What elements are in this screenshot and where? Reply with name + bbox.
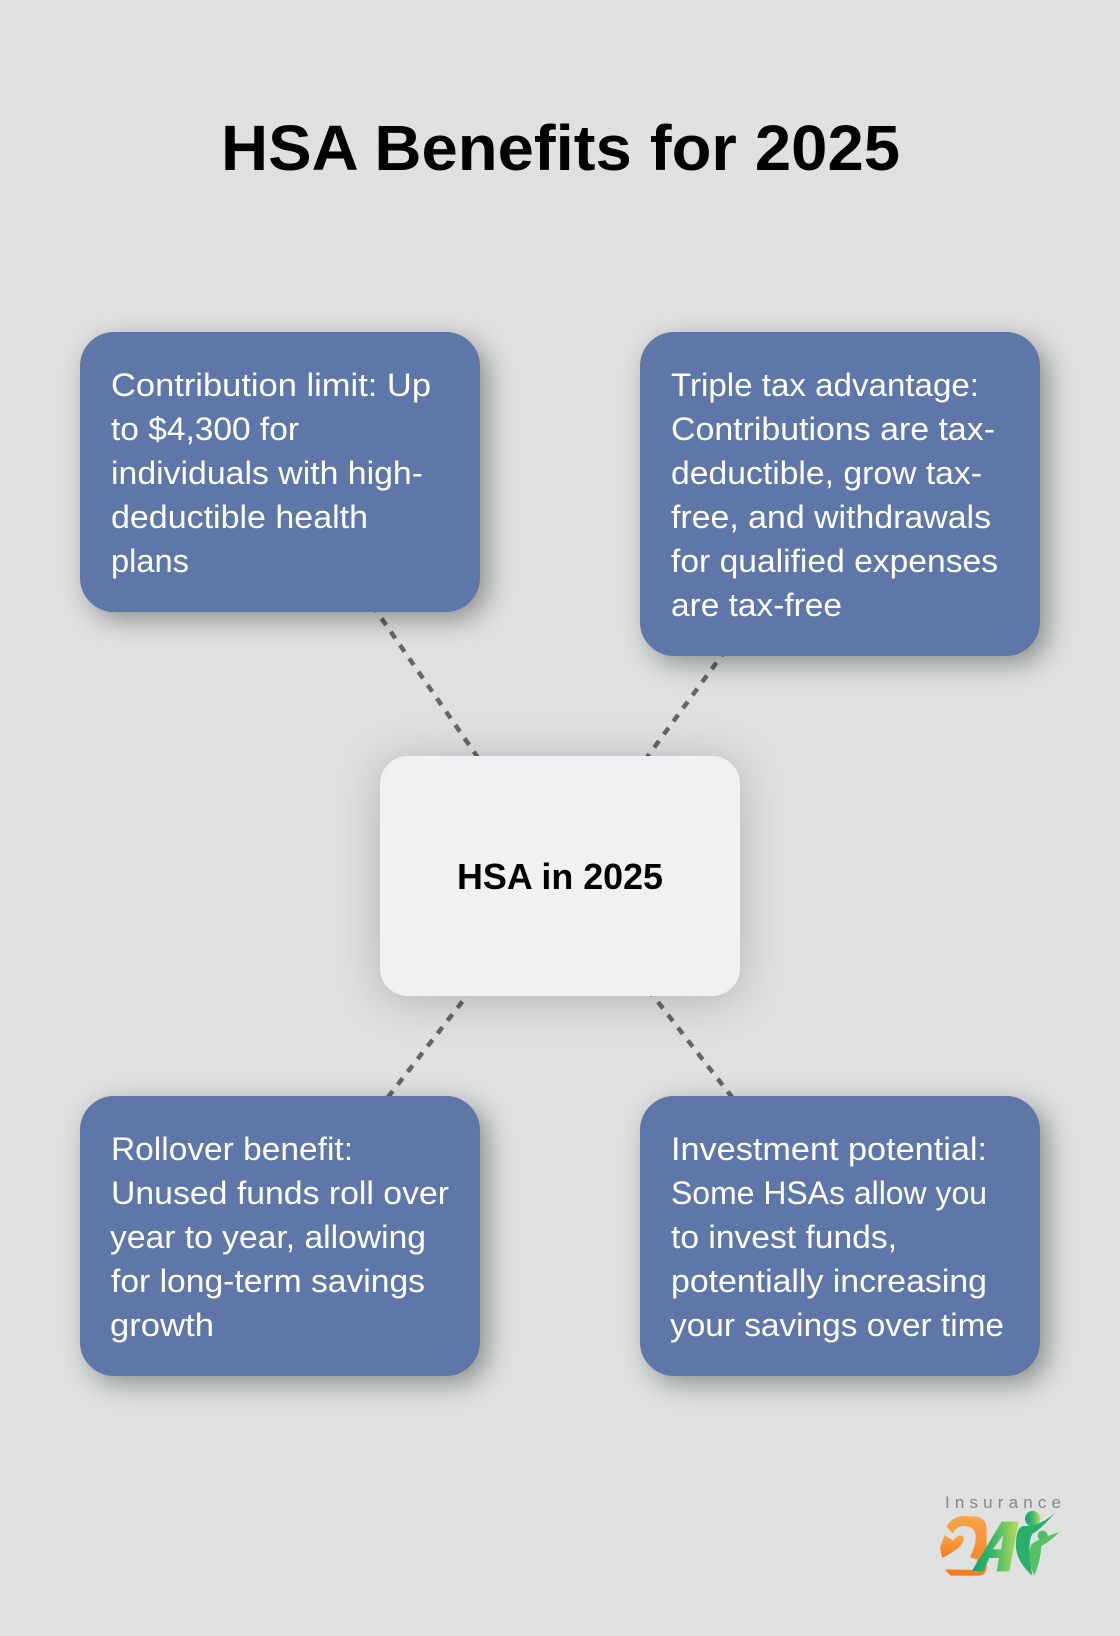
panel: triple tax advantage: Contributions are tax-: [671, 411, 995, 447]
panel: investment potential: Some HSAs allow you: [671, 1175, 987, 1211]
panel: triple tax advantage: [640, 332, 1040, 656]
connector: triple tax advantage to center: [560, 494, 840, 876]
panel: rollover benefit: [80, 1096, 480, 1376]
panel: contribution limit: individuals with high-: [111, 455, 423, 491]
panel: triple tax advantage: are tax-free: [671, 587, 842, 623]
logo: Insurance 2 Ai: Insurance: [945, 1493, 1061, 1512]
panel: rollover benefit: Rollover benefit:: [111, 1131, 353, 1167]
panel: rollover benefit: growth: [110, 1307, 214, 1343]
panel: contribution limit: deductible health: [111, 499, 368, 535]
panel: investment potential: potentially increasing: [671, 1263, 987, 1299]
panel: contribution limit: [80, 332, 480, 612]
panel: center hub: HSA in 2025: [457, 856, 663, 897]
panel: investment potential: your savings over time: [670, 1307, 1004, 1343]
panel: investment potential: [640, 1096, 1040, 1376]
panel: center hub: [380, 756, 740, 996]
connector: contribution limit to center: [280, 472, 560, 876]
panel: rollover benefit: year to year, allowing: [110, 1219, 426, 1255]
panel: triple tax advantage: free, and withdrawals: [671, 499, 991, 535]
connector: rollover benefit to center: [280, 876, 560, 1236]
panel: contribution limit: to $4,300 for: [111, 411, 299, 447]
panel: rollover benefit: Unused funds roll over: [111, 1175, 449, 1211]
panel: contribution limit: Contribution limit: Up: [111, 367, 431, 403]
title: HSA Benefits for 2025: [221, 112, 900, 184]
logo: Insurance 2 Ai: [940, 1493, 1061, 1576]
panel: investment potential: to invest funds,: [671, 1219, 897, 1255]
panel: contribution limit: plans: [111, 543, 189, 579]
connector: investment potential to center: [560, 876, 840, 1236]
panel: triple tax advantage: Triple tax advantage:: [671, 367, 979, 403]
panel: triple tax advantage: deductible, grow tax-: [671, 455, 982, 491]
panel: triple tax advantage: for qualified expenses: [671, 543, 998, 579]
panel: investment potential: Investment potential:: [671, 1131, 987, 1167]
panel: rollover benefit: for long-term savings: [111, 1263, 425, 1299]
